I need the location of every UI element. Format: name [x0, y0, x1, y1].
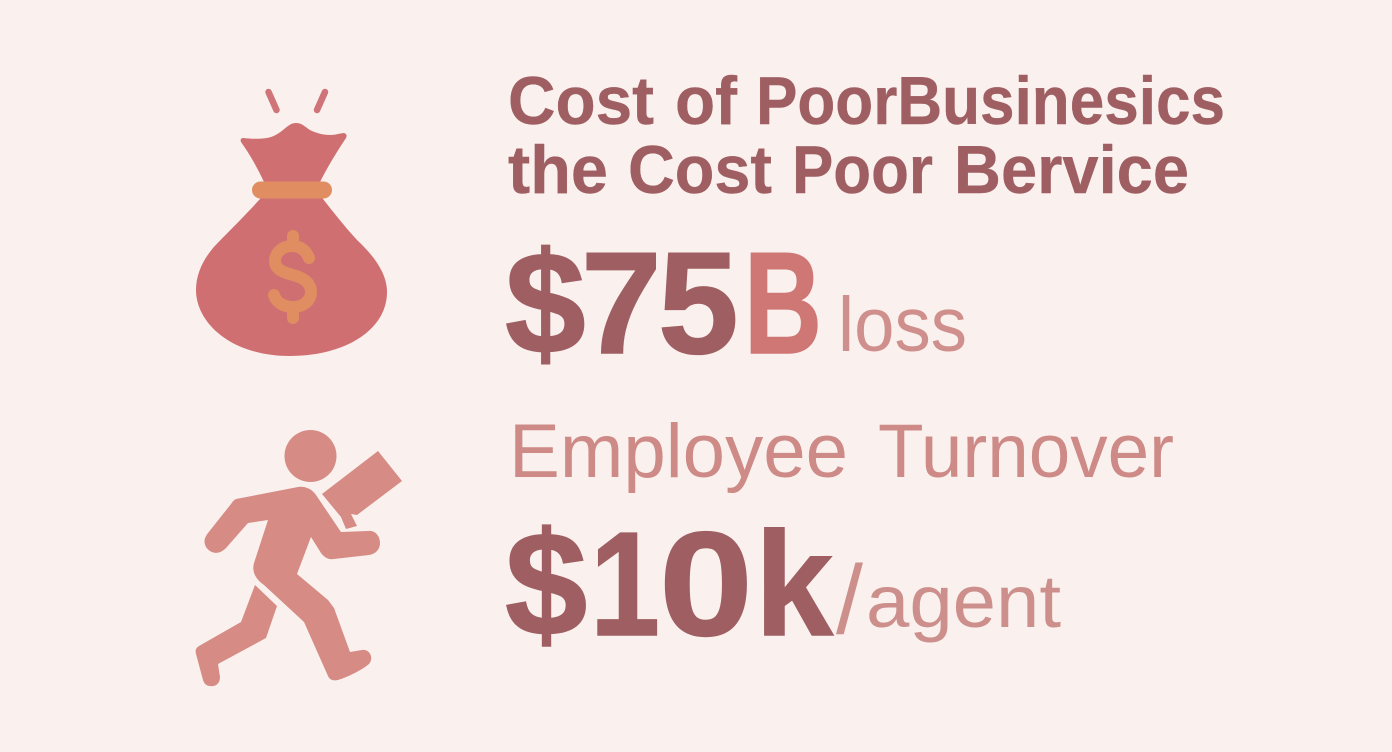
- loss label: loss: [838, 282, 967, 368]
- $10k value: 0: [659, 502, 753, 667]
- subheading: Employee Turnover: Turnover: [878, 409, 1174, 494]
- icon: running employee carrying a box: [196, 430, 402, 686]
- heading line 1: PoorBusinesics: [756, 63, 1225, 139]
- head: [284, 430, 336, 482]
- heading line 2: Bervice: [954, 132, 1189, 208]
- heading line 1: of: [675, 63, 737, 139]
- stat: $10k per agent: [505, 502, 1061, 667]
- heading line 2: Cost: [628, 132, 772, 208]
- box: [322, 451, 402, 529]
- heading line 1: Cost: [508, 63, 654, 139]
- per agent label: /: [836, 545, 863, 654]
- icon: money bag: [196, 92, 387, 356]
- bag tie band: [252, 182, 332, 198]
- per agent label: agent: [866, 560, 1061, 643]
- heading line 2: the: [508, 132, 608, 208]
- rear leg: [196, 585, 277, 686]
- $10k value: k: [755, 502, 834, 667]
- torso, arms and front leg: [205, 487, 380, 680]
- dollar sign on bag: [274, 236, 311, 318]
- $10k value: $: [505, 502, 587, 667]
- $10k value: 1: [590, 502, 660, 667]
- bag body: [196, 123, 387, 356]
- stat: $75B loss: [505, 222, 967, 384]
- B unit: B: [744, 222, 822, 384]
- subheading: Employee Turnover: Employee: [509, 409, 848, 494]
- burst lines above bag: [268, 92, 325, 110]
- heading: [508, 63, 1225, 208]
- $75 value: $75: [505, 222, 739, 384]
- heading line 2: Poor: [792, 132, 933, 208]
